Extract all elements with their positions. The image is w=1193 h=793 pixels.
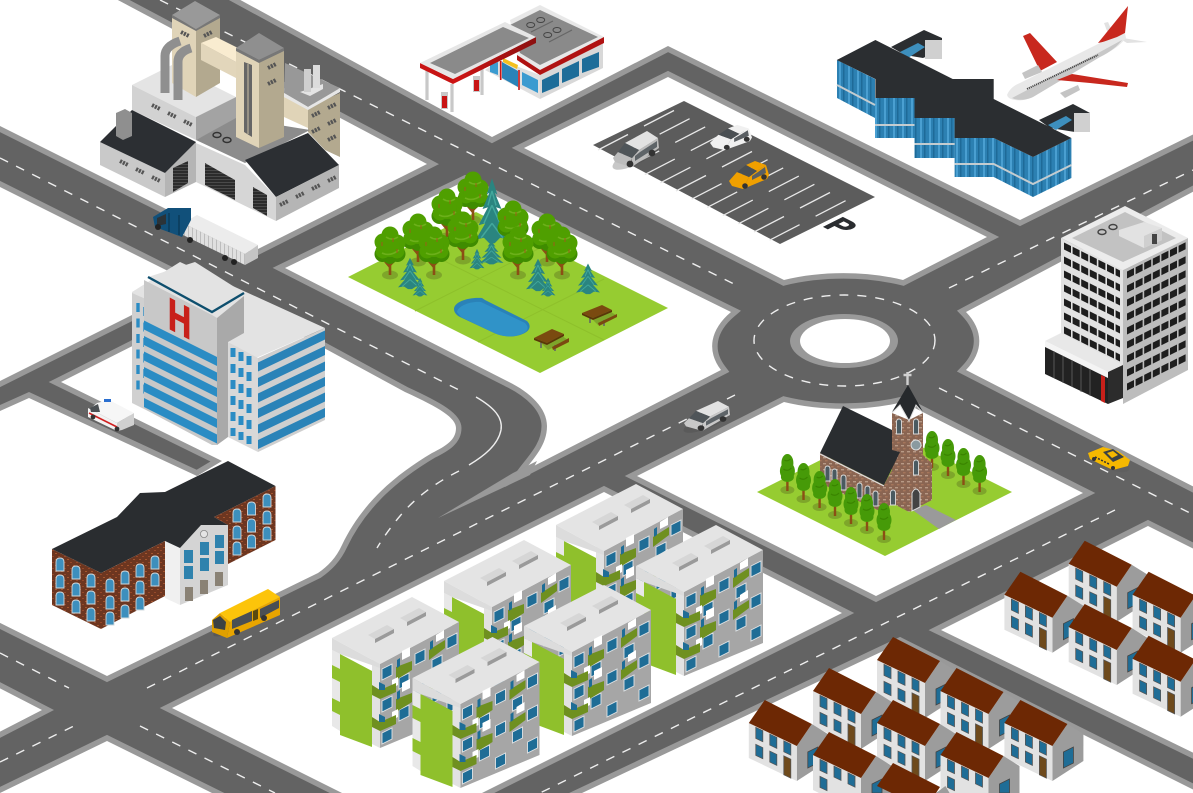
fuel pumps <box>441 76 480 109</box>
factory <box>100 1 340 221</box>
cabin windows <box>1027 55 1098 89</box>
nave wall <box>820 453 884 513</box>
tower windows left <box>1064 246 1120 358</box>
far engine <box>1022 65 1042 79</box>
truck <box>153 208 258 265</box>
pipes <box>165 41 191 100</box>
tower <box>884 413 932 512</box>
back row trees <box>924 431 987 495</box>
chimneys <box>300 65 323 96</box>
tail fin <box>1098 6 1128 43</box>
clock <box>200 530 208 538</box>
block: factory lot <box>0 0 427 252</box>
roundabout island <box>790 314 898 368</box>
near engine <box>1060 85 1080 98</box>
trailer <box>183 215 258 265</box>
lawn seams <box>412 245 604 342</box>
block: park lot <box>285 181 731 471</box>
block: parking lot <box>524 77 987 280</box>
parking area <box>593 101 875 244</box>
store right wall <box>540 42 603 99</box>
belly shade <box>1012 40 1122 100</box>
right tower <box>236 33 284 148</box>
silver car on road <box>680 401 734 437</box>
near wing <box>1057 74 1128 87</box>
big box <box>132 65 236 140</box>
airplane <box>1007 6 1147 100</box>
roof back <box>132 262 325 358</box>
fuselage <box>1007 33 1126 100</box>
tower roof <box>1061 206 1188 270</box>
orange car <box>729 161 769 189</box>
back bridges <box>891 30 1090 132</box>
park <box>348 172 668 373</box>
office tower <box>1045 206 1188 404</box>
white car <box>710 125 752 150</box>
glass facades <box>837 60 1071 197</box>
block: office tower lot <box>966 188 1193 490</box>
blue bands <box>144 325 217 439</box>
block: upper houses lot <box>941 526 1193 756</box>
mid grey roof <box>196 118 310 163</box>
roof <box>837 40 1071 157</box>
left wing <box>100 109 196 197</box>
bay lines <box>598 110 846 240</box>
block: lower houses lot <box>582 643 1193 793</box>
white gable side <box>165 541 180 605</box>
pond <box>454 298 530 336</box>
airport terminal <box>837 30 1090 197</box>
walkway <box>912 505 956 529</box>
canopy <box>420 22 536 84</box>
right face <box>101 541 165 629</box>
canopy poles <box>427 68 482 112</box>
hospital <box>132 262 325 452</box>
kerb wedge <box>438 461 537 518</box>
left annex <box>132 293 148 411</box>
roof <box>52 461 276 573</box>
apartment blocks <box>332 484 763 788</box>
store left wall <box>485 58 540 99</box>
houses <box>749 541 1193 793</box>
gas station <box>420 5 604 112</box>
ambulance <box>88 399 134 431</box>
block: triangle behind hospital <box>0 177 194 391</box>
lawn <box>757 428 1012 556</box>
gabled hall <box>196 133 339 221</box>
silver van <box>609 131 663 175</box>
small beige block <box>284 63 340 157</box>
block: apartments lot <box>172 492 842 793</box>
far tail plane <box>1104 22 1113 33</box>
facade bands <box>837 85 1071 184</box>
far wing <box>1023 33 1057 71</box>
front windows and doors <box>184 535 224 601</box>
right wing left face <box>228 342 258 452</box>
store roof <box>510 5 604 75</box>
lobby <box>1045 333 1123 404</box>
left face <box>52 549 101 629</box>
front row trees <box>780 454 892 543</box>
cropped house at bottom edge <box>877 763 950 793</box>
picnic table near <box>534 329 569 351</box>
near tail plane <box>1117 37 1147 43</box>
beige connector <box>201 37 238 78</box>
right wing right face <box>258 328 325 452</box>
block: hospital and school lot <box>0 297 456 676</box>
side wall <box>217 296 244 445</box>
school <box>52 461 276 629</box>
arched windows <box>56 494 271 625</box>
church <box>757 372 1012 556</box>
parking letter: P <box>816 213 865 238</box>
back wing wall <box>214 486 276 564</box>
gable front <box>180 525 228 605</box>
left tower <box>172 1 220 97</box>
block: gas station and airport lot <box>222 0 1193 220</box>
roof <box>820 406 900 485</box>
bus <box>210 589 282 642</box>
red H: H <box>168 287 191 350</box>
yellow taxi <box>1086 445 1132 477</box>
block: bottom left corner <box>0 741 212 793</box>
tower windows right <box>1127 246 1186 387</box>
roof front with trim <box>148 262 244 312</box>
trees and pines <box>374 172 600 296</box>
main wall <box>144 280 217 445</box>
block: lower left triangle <box>0 678 42 742</box>
picnic table far <box>582 305 617 326</box>
spire and cross <box>892 372 923 421</box>
cab <box>153 208 237 265</box>
block: church lot <box>637 402 1083 596</box>
